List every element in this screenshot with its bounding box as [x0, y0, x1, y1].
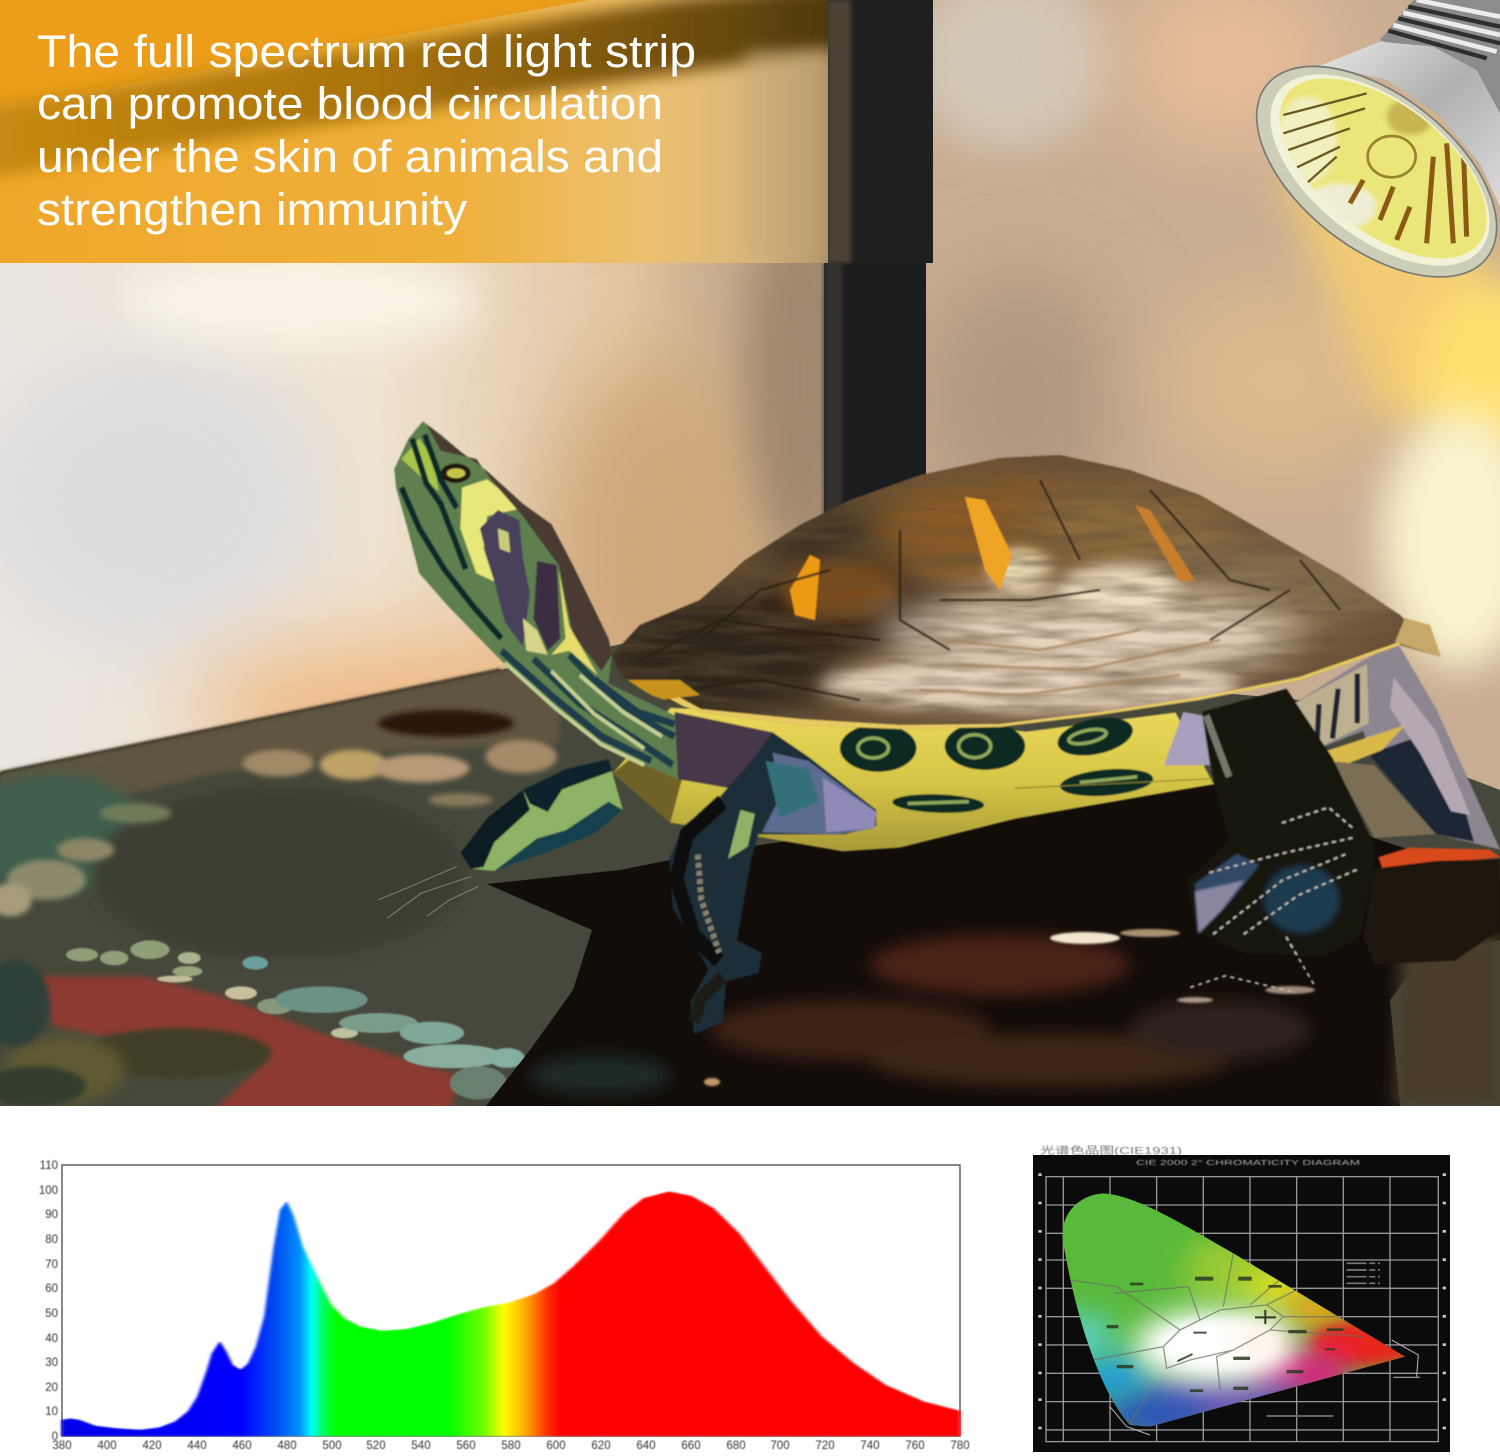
water ripples near flipper [378, 866, 478, 918]
x axis labels: 660 [681, 1440, 701, 1452]
rear far leg, striped [1287, 643, 1500, 849]
neck stripes [501, 651, 675, 765]
y axis labels: 100 [39, 1185, 58, 1197]
banner text: can promote blood circulation [37, 78, 663, 129]
spectrum chart [39, 1160, 970, 1452]
x axis labels: 760 [905, 1440, 925, 1452]
background wall [0, 0, 1500, 800]
y axis labels: 10 [45, 1406, 58, 1418]
x axis labels: 480 [277, 1440, 297, 1452]
dark plastron spots [840, 711, 1154, 814]
x axis labels: 580 [501, 1440, 521, 1452]
y axis labels: 30 [45, 1357, 58, 1369]
y axis labels: 70 [45, 1259, 58, 1271]
front near leg [669, 732, 876, 1034]
CIE black panel [1033, 1155, 1450, 1452]
top banner [0, 0, 900, 263]
foot outer rock, red patch [1378, 848, 1500, 869]
dark head stripes [401, 434, 501, 638]
CIE chromaticity diagram [1033, 1144, 1450, 1452]
x axis labels: 600 [546, 1440, 566, 1452]
x axis labels: 560 [456, 1440, 476, 1452]
banner text: under the skin of animals and [37, 131, 663, 182]
head yellow cheek [460, 479, 523, 581]
photo: turtle under heat lamp [0, 0, 1500, 1110]
spectral power curve [62, 1192, 960, 1436]
lamp glass rim [1219, 25, 1500, 318]
rear near leg [1187, 689, 1500, 991]
banner text: strengthen immunity [37, 184, 468, 235]
shell grain texture [616, 469, 1398, 723]
CIE panel title: CIE 2000 2° CHROMATICITY DIAGRAM [1136, 1158, 1360, 1167]
CIE target cross [1255, 1310, 1276, 1324]
x axis labels: 680 [726, 1440, 746, 1452]
y axis labels [39, 1160, 58, 1443]
x axis labels: 420 [142, 1440, 162, 1452]
chromaticity horseshoe [1053, 1187, 1423, 1440]
x axis labels: 640 [636, 1440, 656, 1452]
x axis labels: 740 [860, 1440, 880, 1452]
y axis labels: 80 [45, 1234, 58, 1246]
y axis labels: 40 [45, 1333, 58, 1345]
aquarium floor [0, 640, 1500, 1110]
lamp screw base [1380, 0, 1500, 120]
banner text: The full spectrum red light strip [37, 26, 696, 77]
neck and head [393, 420, 774, 789]
CIE caption: 光谱色品图(CIE1931) [1040, 1144, 1182, 1157]
x axis labels: 700 [770, 1440, 790, 1452]
y axis labels: 0 [52, 1431, 58, 1443]
lamp reflector body [1313, 42, 1500, 207]
shell rear tip [1395, 618, 1441, 657]
shell [595, 440, 1460, 740]
x axis labels: 520 [366, 1440, 386, 1452]
x axis labels: 720 [815, 1440, 835, 1452]
banner text [37, 26, 696, 235]
y axis labels: 60 [45, 1283, 58, 1295]
head top [426, 424, 612, 671]
aquarium post [824, 0, 933, 523]
far front flipper [460, 759, 623, 871]
plastron [613, 708, 1214, 851]
x axis labels: 620 [591, 1440, 611, 1452]
x axis labels: 540 [411, 1440, 431, 1452]
icon: halogen lamp bulb [1219, 0, 1500, 318]
lamp yellow reflector [1253, 67, 1500, 267]
turtle [394, 421, 1500, 1034]
x axis labels: 780 [950, 1440, 970, 1452]
x axis labels [52, 1440, 970, 1452]
x axis labels: 460 [232, 1440, 252, 1452]
ear patch [480, 510, 530, 647]
y axis labels: 20 [45, 1382, 58, 1394]
y axis labels: 90 [45, 1209, 58, 1221]
banner background [0, 0, 900, 263]
x axis labels: 380 [52, 1440, 72, 1452]
dark rock and reflection [486, 780, 1500, 1106]
x axis labels: 440 [187, 1440, 207, 1452]
grey rock under rear [1332, 761, 1436, 838]
x axis labels: 500 [322, 1440, 342, 1452]
eye [441, 463, 471, 483]
x axis labels: 400 [97, 1440, 117, 1452]
y axis labels: 50 [45, 1308, 58, 1320]
y axis labels: 110 [40, 1160, 58, 1172]
orange scute marks [790, 497, 1195, 620]
plot frame [62, 1165, 960, 1436]
scute lines and growth rings [640, 480, 1340, 700]
